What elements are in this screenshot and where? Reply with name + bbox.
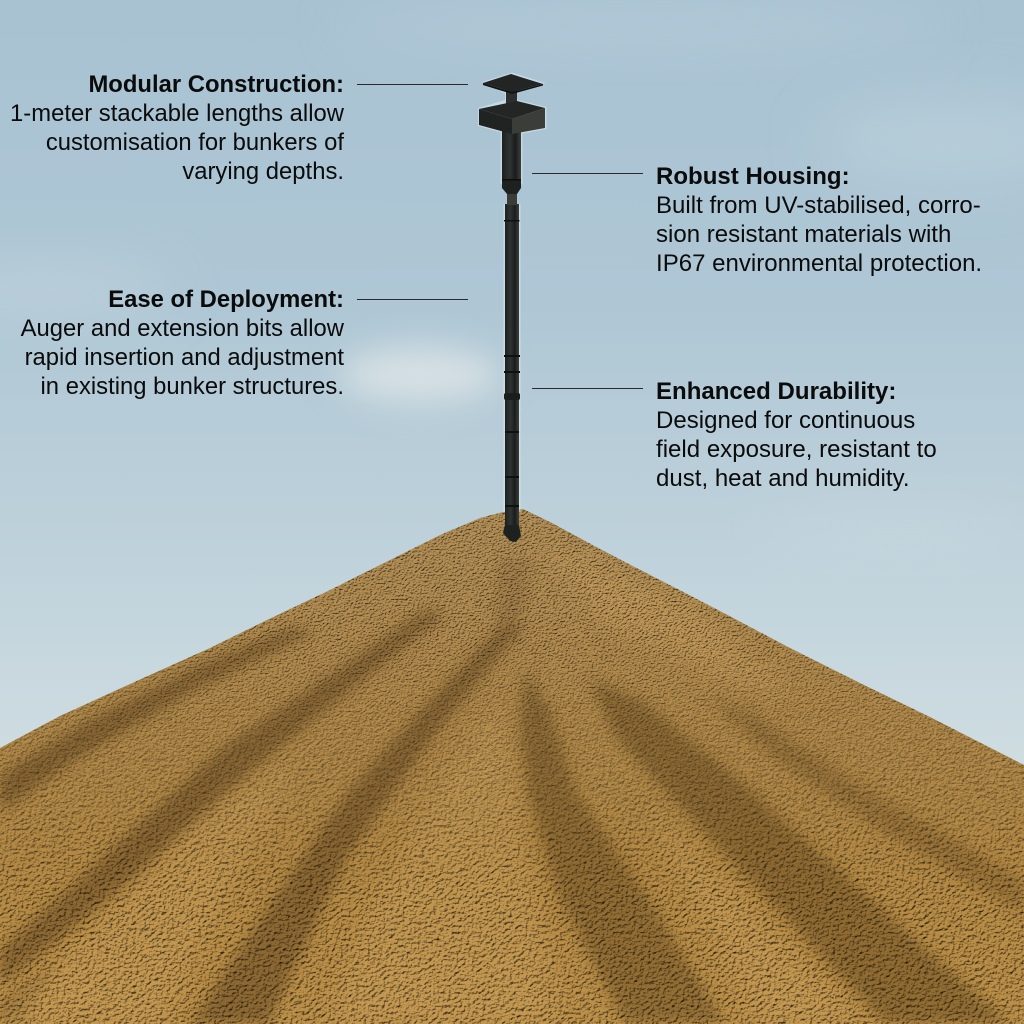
probe halo bbox=[478, 72, 546, 512]
probe upper shaft bbox=[502, 130, 521, 180]
cap plate bbox=[483, 74, 543, 92]
callout: Ease of Deployment: Auger and extension bits allow bbox=[21, 315, 345, 342]
probe lower shaft bbox=[505, 204, 519, 529]
pile highlights bbox=[20, 569, 820, 1015]
callout: Modular Construction bbox=[10, 71, 345, 185]
leader lines bbox=[357, 84, 643, 388]
callout: Robust Housing bbox=[656, 163, 982, 277]
callout: Enhanced Durability bbox=[656, 378, 937, 492]
callout: Enhanced Durability: Enhanced Durability: bbox=[656, 378, 896, 405]
callout: Modular Construction: Modular Construction: bbox=[88, 71, 344, 98]
callout: Enhanced Durability: dust, heat and humidity. bbox=[656, 465, 910, 492]
callout: Modular Construction: varying depths. bbox=[182, 158, 344, 185]
callout: Ease of Deployment bbox=[21, 286, 345, 400]
probe base in grain bbox=[503, 525, 521, 542]
callout: Robust Housing: Robust Housing: bbox=[656, 163, 850, 190]
probe neck bbox=[507, 192, 517, 205]
callout: Ease of Deployment: rapid insertion and adjustment bbox=[25, 344, 344, 371]
callout: Enhanced Durability: Designed for continuous bbox=[656, 407, 915, 434]
callout: Modular Construction: customisation for bunkers of bbox=[46, 129, 344, 156]
callout: Robust Housing: sion resistant materials with bbox=[656, 221, 951, 248]
callout: Robust Housing: Built from UV-stabilised, corro- bbox=[656, 192, 981, 219]
housing stem bbox=[506, 90, 517, 104]
callout: Ease of Deployment: Ease of Deployment: bbox=[108, 286, 344, 313]
callout: Enhanced Durability: field exposure, resistant to bbox=[656, 436, 937, 463]
grain pile bbox=[0, 500, 1024, 1024]
callout: Modular Construction: 1-meter stackable lengths allow bbox=[10, 100, 345, 127]
callout: Ease of Deployment: in existing bunker structures. bbox=[40, 373, 344, 400]
sensor housing bbox=[479, 101, 545, 119]
pile texture, coarse bbox=[0, 646, 1024, 1024]
sensor probe bbox=[478, 72, 546, 542]
pile furrows bbox=[0, 560, 1024, 1024]
pile texture, fine bbox=[0, 509, 1024, 878]
callout: Robust Housing: IP67 environmental protection. bbox=[656, 250, 982, 277]
